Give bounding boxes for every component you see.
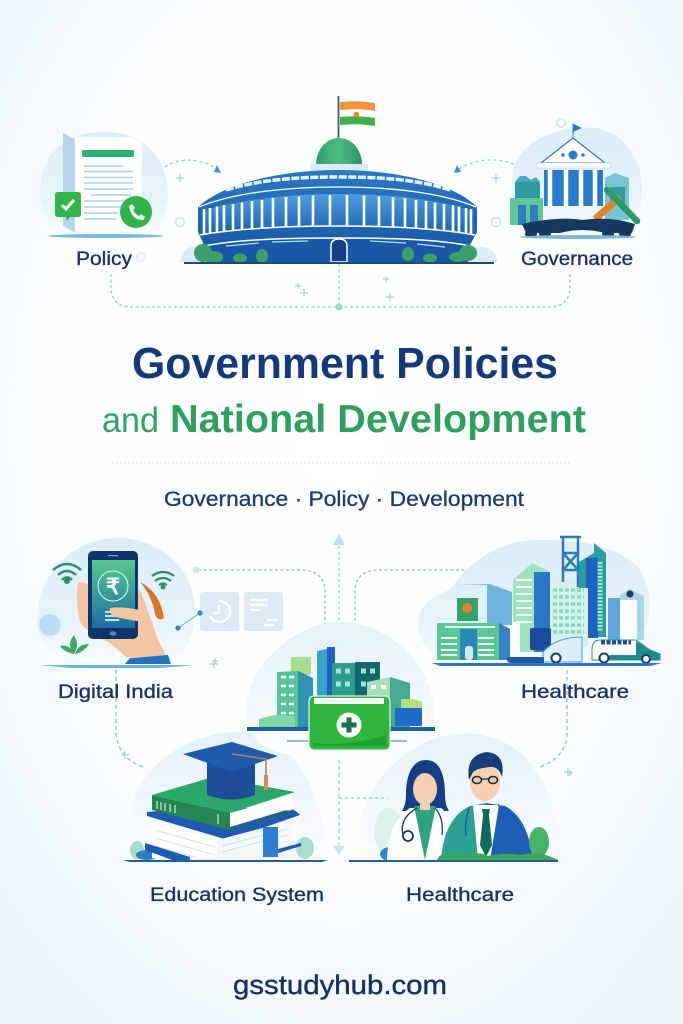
panel: center city and medical kit (246, 622, 435, 760)
governance backdrop blob (512, 128, 642, 237)
icon: globe (38, 613, 62, 637)
left plants (374, 808, 404, 861)
ground shadow (48, 234, 164, 238)
label: digital india: Digital India (58, 681, 173, 703)
panel: city right (418, 537, 662, 703)
bushes (130, 837, 314, 859)
card: lines (244, 592, 283, 631)
center buildings (247, 647, 435, 731)
education backdrop blob (117, 732, 327, 860)
panel: parliament (180, 96, 498, 264)
icon: phone (120, 196, 152, 228)
ground (432, 663, 662, 666)
trees (194, 244, 477, 263)
orange strap (140, 582, 164, 619)
panel: digital india (37, 538, 195, 703)
hospital sign (457, 598, 478, 621)
hand (77, 582, 167, 657)
title line 2: national development: National Development (170, 398, 586, 441)
ground shadow (40, 665, 195, 668)
dome (316, 138, 362, 165)
panel: governance (510, 124, 642, 270)
policy backdrop blob (40, 132, 168, 236)
lattice tower (560, 537, 581, 587)
icon: medical kit (309, 696, 390, 750)
lower book (145, 806, 301, 860)
label: education system: Education System (150, 884, 324, 906)
bus (592, 640, 660, 663)
small arrows beside kit (287, 740, 407, 742)
icon: plant (60, 635, 89, 662)
card: clock (200, 592, 239, 631)
door (331, 239, 347, 262)
man doctor (441, 752, 533, 860)
doctors backdrop blob (359, 734, 557, 860)
center grid building (551, 582, 588, 647)
ground (349, 860, 558, 862)
ground (122, 860, 328, 862)
bushes and leaf (437, 827, 558, 860)
lower wall (207, 240, 468, 262)
tower left (513, 563, 550, 652)
sleeve (125, 655, 171, 664)
icon: graduation cap (183, 742, 278, 800)
dome base (310, 164, 368, 172)
label: healthcare right: Healthcare (521, 681, 629, 703)
thumb (110, 607, 142, 622)
small info cards (175, 592, 283, 631)
columns (204, 195, 471, 234)
digital backdrop blob (37, 538, 195, 665)
icon: gavel (595, 190, 637, 221)
connector to cards (175, 610, 203, 631)
panel: policy (40, 132, 168, 270)
phone: ₹ (106, 574, 120, 599)
subtitle: Governance · Policy · Development (164, 488, 524, 511)
center backdrop blob (246, 622, 434, 760)
phone (88, 551, 138, 639)
label: governance: Governance (521, 248, 633, 270)
colonnade (203, 194, 472, 234)
lower bands (200, 226, 475, 246)
right building (605, 173, 629, 220)
label: policy: Policy (76, 248, 132, 270)
connector: center spine (333, 752, 388, 855)
title line 1: Government Policies (132, 339, 558, 388)
hospital lower (437, 623, 510, 660)
connectors: upper (111, 160, 570, 311)
icon: temple flag (573, 124, 581, 138)
footer: website: gsstudyhub.com (233, 970, 447, 1000)
icon: check badge (55, 192, 81, 221)
far right tower (608, 589, 644, 640)
ambulance (543, 637, 582, 662)
tower right (579, 543, 606, 638)
woman doctor (387, 760, 453, 860)
roof edge (199, 187, 476, 207)
city backdrop blob (418, 540, 649, 663)
sparkles (121, 119, 573, 776)
left building (510, 176, 543, 225)
temple (537, 138, 610, 221)
ground line (184, 262, 494, 264)
document (75, 137, 142, 232)
icon: flag (338, 96, 375, 142)
hospital upper (457, 584, 512, 625)
upper book (152, 777, 295, 830)
panel: healthcare people (349, 734, 558, 906)
folded page (63, 133, 76, 233)
label: healthcare lower: Healthcare (406, 884, 514, 906)
wheels (525, 230, 631, 238)
title line 2: and: and (102, 401, 159, 440)
open book base (522, 219, 635, 233)
ground shadow (520, 235, 636, 239)
frieze (226, 177, 450, 190)
backing hills (180, 247, 498, 262)
connectors: lower (116, 534, 567, 767)
suitcase (530, 628, 551, 650)
icon: wifi right (152, 572, 174, 590)
icon: wifi left (53, 564, 81, 584)
title (102, 339, 586, 441)
car (507, 657, 544, 663)
drum (198, 170, 477, 262)
panel: education (117, 732, 328, 906)
